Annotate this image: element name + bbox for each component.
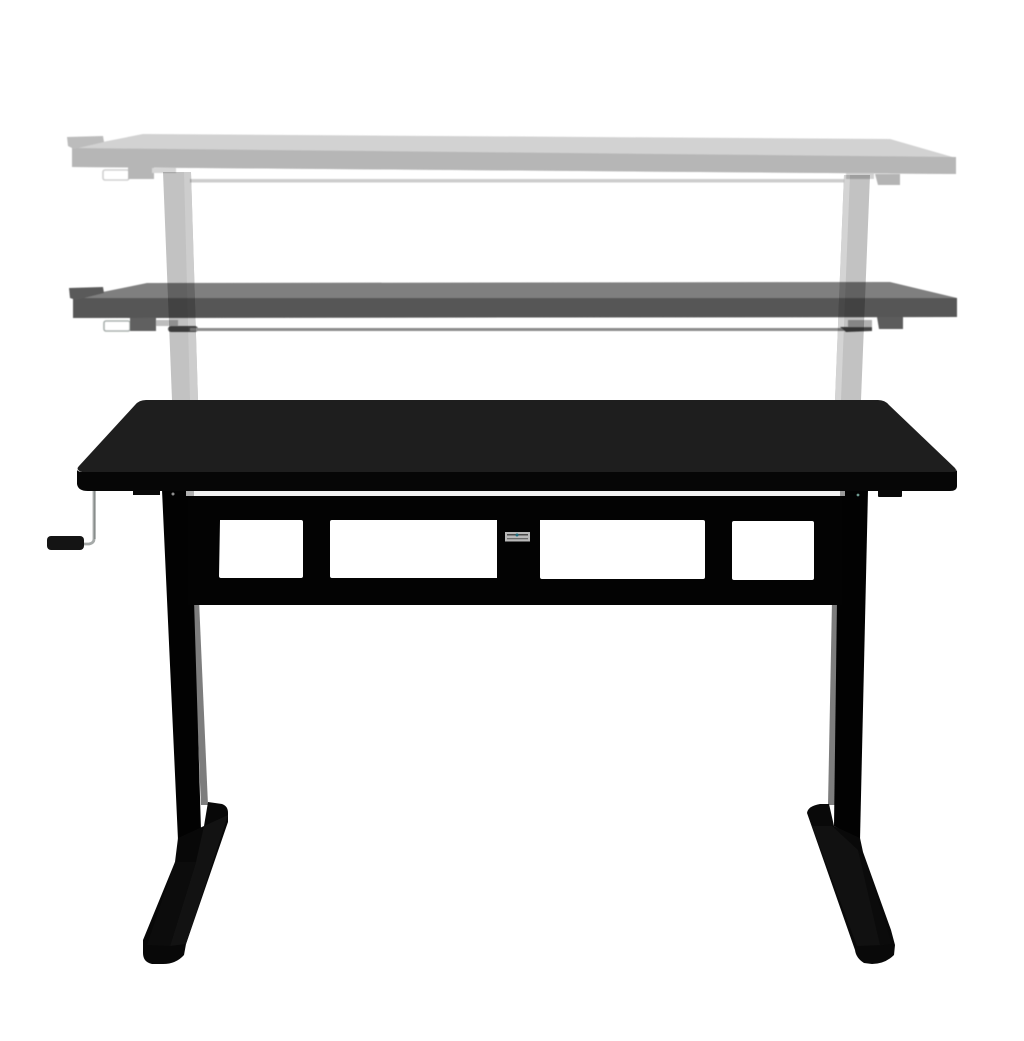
right foot (807, 804, 895, 964)
desktop top surface (78, 400, 956, 474)
ghost desk: highest position (67, 134, 956, 185)
mount bracket left (133, 490, 160, 495)
brand label on crossbeam (505, 532, 530, 542)
left leg (143, 490, 228, 964)
left foot (143, 802, 228, 964)
right leg (807, 490, 895, 964)
mount bracket right (878, 490, 902, 497)
desktop front edge (77, 469, 957, 491)
desktop: main lowest position (77, 400, 957, 497)
ghost legs: raised column behind the desk (163, 172, 870, 400)
main desk: legs and feet (143, 490, 895, 964)
crossbeam frame with four cut-outs (172, 491, 859, 605)
ghost desk: middle position (69, 282, 957, 332)
hand crank (47, 491, 95, 550)
